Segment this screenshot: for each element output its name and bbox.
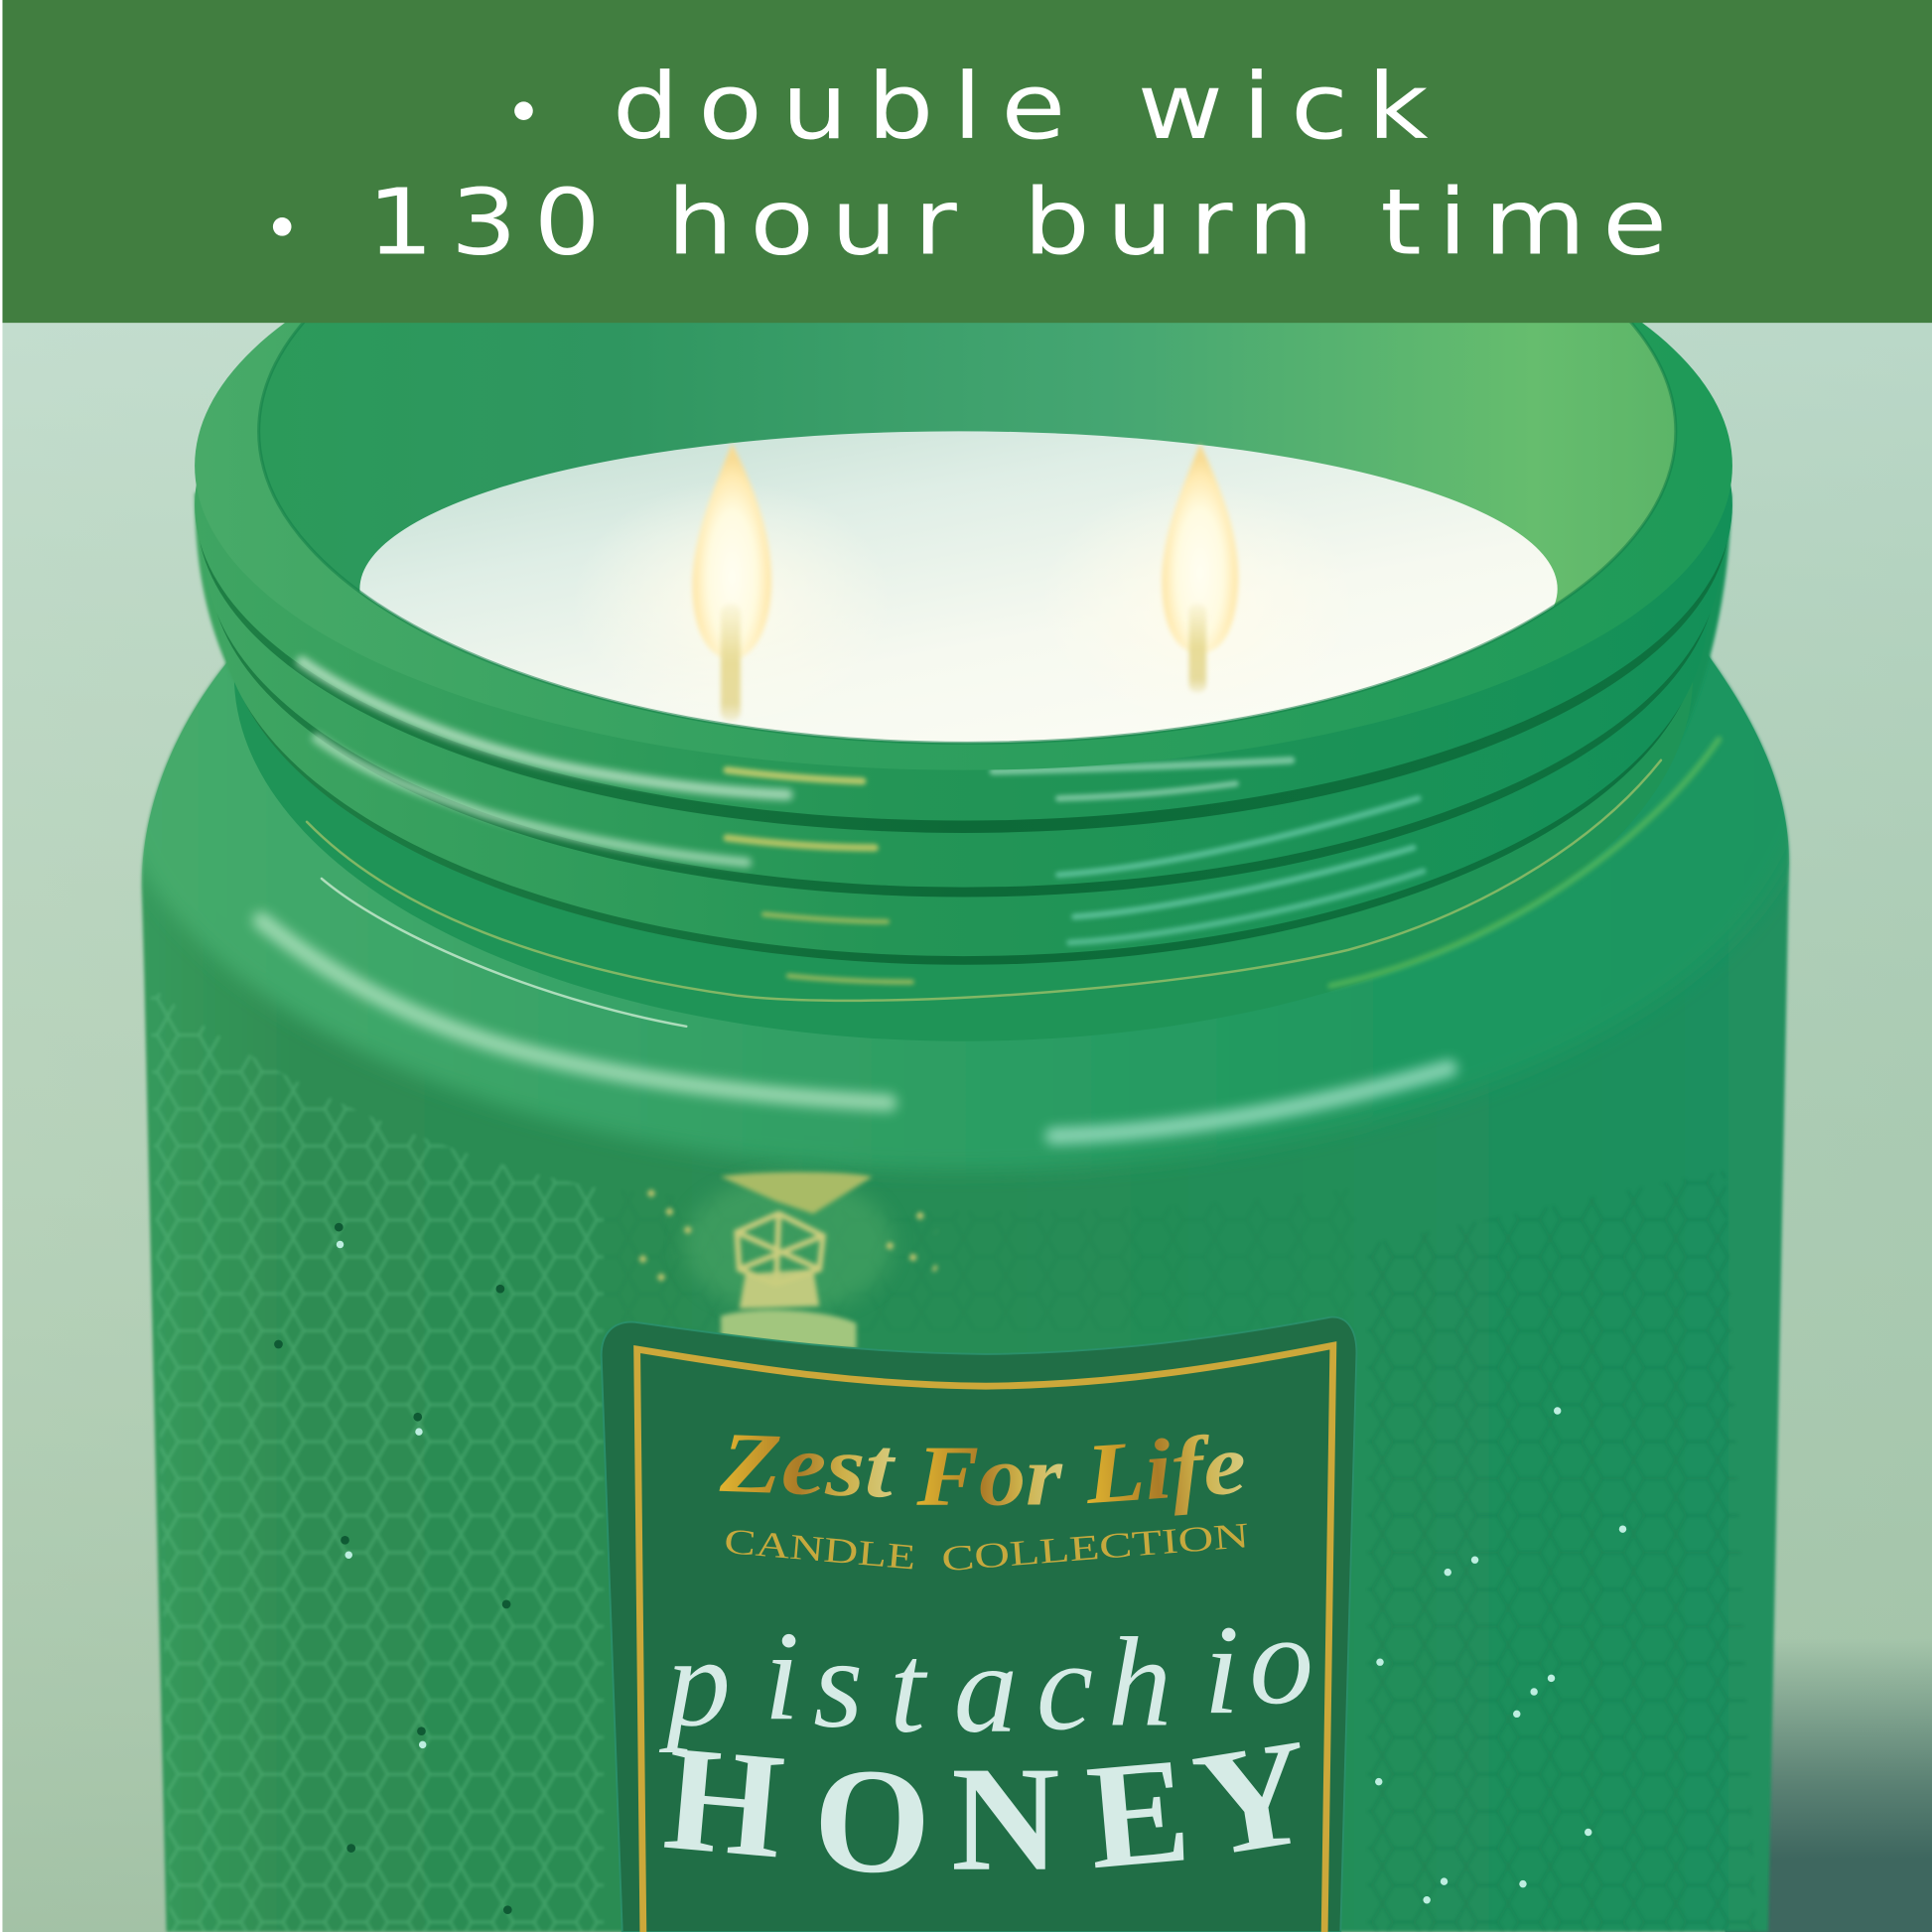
label gold border [637,1345,1333,1932]
wax surface [359,431,1558,747]
bullet: burn time [273,217,292,236]
heading line: burn time: 130 hour burn time [367,170,1667,276]
surface glints and dimples [274,1223,1626,1914]
scent name: pistachio: pistachio [658,1588,1313,1759]
bullet: double wick [514,101,533,120]
scent name: HONEY: O [811,1735,933,1906]
scent name: HONEY: N [951,1735,1059,1902]
jar body [142,647,1789,1932]
honeycomb texture right [1368,1171,1756,1932]
brand name: Life [1081,1416,1249,1522]
neck threads [195,190,1732,1041]
label panel [602,1317,1356,1932]
candle jar [139,323,1791,1932]
right flame [1162,444,1238,692]
shoulder highlights [261,920,1449,1136]
gold emblem [640,1173,936,1349]
rim lip edge [259,119,1676,743]
brand name [718,1415,1249,1523]
heading line: double wick: double wick [613,55,1429,160]
scent name: HONEY: Y [1184,1707,1322,1889]
honeycomb texture center [604,1189,1355,1330]
scent name: HONEY: E [1081,1725,1195,1900]
collection line: CANDLE [723,1521,917,1578]
jar rim [195,162,1732,770]
neck highlights [302,661,1719,1027]
label [602,1317,1356,1932]
scent name: HONEY: H [659,1714,790,1890]
collection line [723,1515,1250,1579]
brand name: Zest [718,1415,897,1516]
header banner [2,0,1932,323]
left flame [692,444,771,721]
jar shoulder [142,655,1789,1172]
jar inner wall [259,119,1676,743]
honeycomb texture left [150,986,604,1932]
collection line: COLLECTION [940,1515,1250,1579]
brand name: For [915,1428,1063,1523]
scent name: HONEY [659,1707,1322,1906]
